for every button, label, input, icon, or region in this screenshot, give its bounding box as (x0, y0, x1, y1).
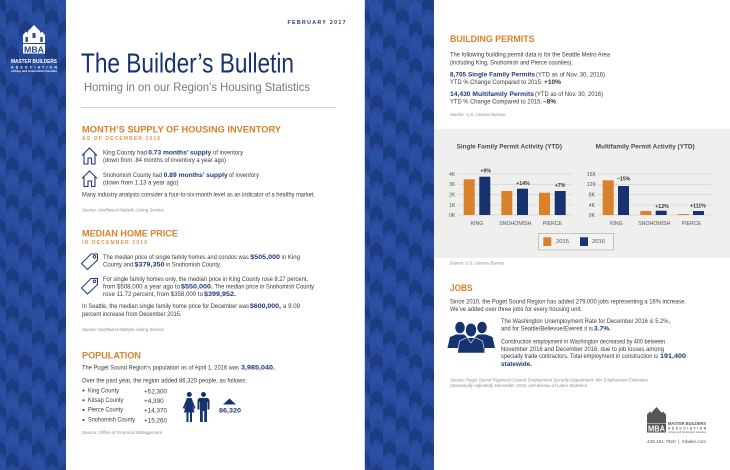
icon: three business people (448, 322, 495, 353)
list: county additions: King County (88, 388, 119, 394)
text: construction employment: 191,400 (660, 354, 687, 360)
text: unemployment: The Washington Unemployment Rate for December 2016 is 5.2%, (501, 319, 670, 325)
text: construction employment: specialty trade contractors. Total employment in construction is (501, 354, 658, 360)
text: Snohomish supply: Snohomish County had (103, 173, 162, 179)
text: construction employment: Construction employment in Washington decreased by 400 between (501, 339, 665, 345)
section: building permits (450, 34, 611, 117)
text: Seattle price (82, 304, 301, 318)
text: price paragraph 2: The median price in Snohomish County (214, 284, 314, 290)
heading: inventory: MONTH’S SUPPLY OF HOUSING INVENTORY (82, 124, 281, 134)
legend: 2016 (592, 239, 605, 245)
footer contact: 425.451.7920 | mbaks.com (647, 439, 706, 445)
text: price paragraph 1 (103, 255, 300, 268)
x axis labels (610, 221, 701, 227)
footer logo (647, 407, 707, 434)
text: population growth intro: Over the past year, the region added 86,320 people, as follows: (82, 379, 247, 385)
text: price paragraph 2: from $508,000 a year ago to (103, 284, 181, 290)
text: King County supply: of inventory (213, 150, 243, 156)
text: King County supply (103, 150, 243, 164)
text: King County supply: 0.73 months’ supply (148, 150, 212, 156)
section: jobs (448, 283, 687, 388)
bars (464, 177, 566, 215)
change labels: +9% (480, 168, 491, 174)
text: multifamily permits: –8% (543, 100, 557, 106)
list: county additions: Pierce County (88, 408, 123, 414)
change labels (617, 176, 706, 210)
y axis labels (587, 172, 596, 219)
legend: 2015 (556, 239, 569, 245)
text: single family permits: YTD % Change Compared to 2015: (450, 80, 543, 86)
text: population total: The Puget Sound Region’s population as of April 1, 2016 was (82, 366, 239, 372)
source: NWMLS price: Source: Northwest Multiple Listing Service (82, 327, 165, 332)
footer logo: ASSOCIATION (668, 426, 707, 430)
change labels: +12% (655, 204, 669, 210)
list: county additions: +52,300 (144, 389, 168, 395)
chart title: multifamily: Multifamily Permit Activity (YTD) (596, 144, 695, 150)
y axis labels: 0K (449, 213, 456, 219)
x axis labels: KING (610, 221, 623, 227)
y axis labels: 0K (589, 213, 596, 219)
section: median home price (82, 229, 314, 332)
text: construction employment: November 2016 and December 2016, due to job losses among (501, 347, 664, 353)
text: Snohomish supply: of inventory (229, 173, 259, 179)
list: county additions: +4,390 (144, 399, 164, 405)
text: unemployment (501, 319, 670, 333)
text: single family permits: (YTD as of Nov. 30, 2016) (536, 73, 605, 79)
y axis labels: 2K (449, 192, 456, 198)
text: construction employment: statewide. (501, 362, 532, 368)
text: single family permits: +10% (544, 80, 562, 86)
change labels (480, 168, 566, 189)
change labels: +111% (690, 204, 706, 210)
text: jobs intro (450, 299, 686, 313)
section: population (82, 351, 275, 435)
text: King County supply: (down from .84 months of inventory a year ago) (103, 158, 226, 164)
text: population total: 3,985,040. (241, 366, 275, 372)
logo: Master Builders Association: of King and Snohomish Counties (11, 69, 58, 73)
chart: single family permit activity (449, 144, 573, 227)
heading: population: POPULATION (82, 351, 141, 361)
text: price paragraph 2: $399,952. (204, 292, 236, 298)
logo: Master Builders Association: MASTER BUILDERS (11, 59, 57, 65)
source: census permits: Source: U.S. Census Bureau (450, 112, 506, 117)
x axis labels: SNOHOMISH (499, 221, 532, 227)
text: healthy market note: Many industry analysts consider a four-to-six-month level as an indicator of a healthy market. (82, 192, 315, 198)
heading: jobs: JOBS (450, 283, 472, 293)
panel: centre blue strip (364, 0, 434, 470)
y axis labels (449, 172, 456, 219)
icon: house King County (82, 148, 97, 164)
footer logo: MBA (648, 424, 665, 434)
text: Snohomish supply: 0.89 months’ supply (164, 173, 228, 179)
text: price paragraph 2: $550,000. (181, 284, 213, 290)
footer logo: of King and Snohomish Counties (668, 430, 707, 434)
text: multifamily permits: (YTD as of Nov. 30, 2016) (535, 92, 603, 98)
text: Seattle price: percent increase from December 2015. (82, 312, 182, 318)
logo: Master Builders Association (11, 25, 58, 73)
change labels: +7% (555, 183, 566, 189)
icon: price tag 1 (82, 254, 98, 270)
heading: building permits: BUILDING PERMITS (450, 34, 534, 44)
figure: 86,320: 86,320 (219, 409, 242, 415)
x axis labels: SNOHOMISH (638, 221, 671, 227)
icon: house Snohomish County (82, 171, 97, 186)
x axis labels: KING (471, 221, 483, 227)
text: price paragraph 1: The median price of single family homes and condos was (103, 255, 249, 261)
text: Snohomish supply (103, 173, 259, 186)
icon: up arrow (223, 398, 236, 404)
source: census charts: Source: U.S. Census Bureau (450, 261, 505, 266)
text: permits intro: (including King, Snohomish and Pierce counties). (450, 60, 573, 66)
source: NWMLS: Source: Northwest Multiple Listing Service (82, 207, 165, 212)
text: price paragraph 1: $505,000 (250, 255, 281, 261)
change labels: +14% (516, 181, 530, 187)
change labels: –15% (617, 176, 631, 182)
text: permits intro: The following building permit data is for the Seattle Metro Area (450, 53, 611, 59)
text: King County supply: King County had (103, 150, 147, 156)
x axis labels: PIERCE (682, 221, 701, 227)
chart: multifamily permit activity (587, 144, 712, 227)
text: price paragraph 1: County and (103, 262, 134, 268)
text: multifamily permits: 14,430 Multifamily Permits (450, 92, 535, 98)
text: multifamily permits (450, 92, 603, 106)
icon: price tag 2 (82, 278, 98, 294)
text: price paragraph 1: $379,350 (134, 262, 165, 268)
subtitle: Homing in on our Region’s Housing Statistics (84, 80, 310, 94)
x axis labels (471, 221, 562, 227)
icon: woman and man (183, 392, 210, 422)
text: jobs intro: Since 2010, the Puget Sound Region has added 279,000 jobs representing a 16% increase. (450, 299, 686, 305)
heading: median price: MEDIAN HOME PRICE (82, 229, 178, 239)
y axis labels: 3K (449, 182, 456, 188)
list: county additions: +14,370 (144, 409, 168, 415)
y axis labels: 12K (587, 182, 596, 188)
text: Seattle price: a 9.09 (283, 304, 301, 310)
y axis labels: 1K (449, 203, 456, 209)
text: Snohomish supply: (down from 1.13 a year ago) (103, 180, 178, 186)
footer logo: MASTER BUILDERS (668, 421, 707, 427)
bars (603, 180, 704, 215)
y axis labels: 16K (587, 172, 596, 178)
logo: Master Builders Association: MBA (24, 44, 44, 54)
source: jobs (450, 378, 649, 388)
chart title: single family: Single Family Permit Activity (YTD) (457, 144, 562, 150)
text: price paragraph 2 (103, 277, 314, 298)
source: jobs: Source: Puget Sound Regional Council; Employment Security Department: WA Employment Estimates (450, 378, 649, 383)
text: Seattle price: $600,000, (250, 304, 281, 310)
panel: charts band (434, 129, 730, 258)
subheading: inventory: AS OF DECEMBER 2016 (82, 136, 160, 142)
y axis labels: 4K (589, 203, 596, 209)
text: single family permits (450, 73, 605, 86)
legend (538, 234, 614, 250)
section: housing inventory (82, 124, 315, 212)
text: price paragraph 2: rose 11.72 percent, from $358,000 to (103, 292, 204, 298)
list: county additions (82, 388, 168, 425)
logo: Master Builders Association: ASSOCIATION (11, 65, 57, 69)
source: OFM: Source: Office of Financial Management (82, 430, 163, 435)
text: unemployment: and for Seattle/Bellevue/Everett it is (501, 327, 593, 333)
date: FEBRUARY 2017 (288, 20, 346, 26)
panel: left blue strip (0, 0, 66, 470)
text: price paragraph 1: in King (282, 255, 300, 261)
y axis labels: 8K (589, 192, 596, 198)
subheading: median price: IN DECEMBER 2016 (82, 240, 147, 246)
text: unemployment: 3.7%. (594, 327, 611, 333)
title: The Builder’s Bulletin (81, 48, 294, 78)
text: construction employment (501, 339, 687, 368)
text: multifamily permits: YTD % Change Compared to 2015: (450, 100, 542, 106)
text: price paragraph 2: For single family homes only, the median price in King County rose 8.27 percent, (103, 277, 308, 283)
list: county additions: +15,260 (144, 419, 168, 425)
text: permits intro (450, 53, 611, 66)
text: single family permits: 8,705 Single Family Permits (450, 73, 536, 79)
list: county additions: Kitsap County (88, 398, 124, 404)
source: jobs: (Seasonally Adjusted), December 2016, and Bureau of Labor Statistics. (450, 383, 588, 388)
text: Seattle price: In Seattle, the median single family home price for December was (82, 304, 249, 310)
list: county additions: Snohomish County (88, 418, 135, 424)
y axis labels: 4K (449, 172, 456, 178)
text: jobs intro: We’ve added over three jobs for every housing unit. (450, 307, 582, 313)
x axis labels: PIERCE (543, 221, 562, 227)
text: price paragraph 1: in Snohomish County. (166, 262, 221, 268)
